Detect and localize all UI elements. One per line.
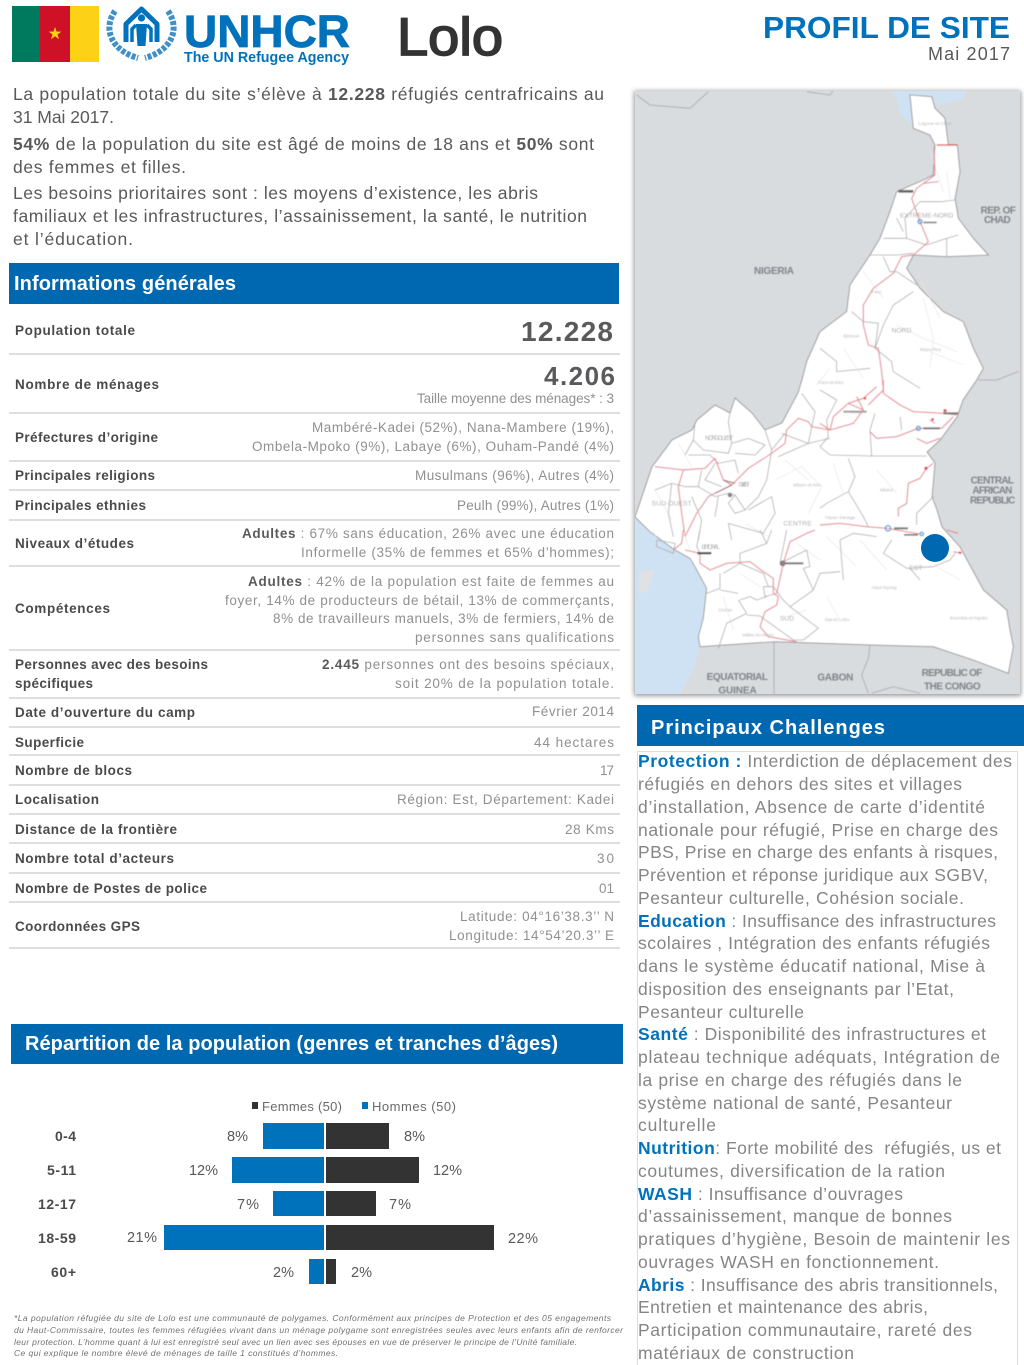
text: WASH: ouvrages WASH en fonctionnement. <box>638 1252 939 1272</box>
row: nombre de blocs <box>15 763 614 778</box>
bar chart: age pyramid: 12% <box>189 1163 218 1179</box>
row: distance de la frontière: 28 Kms <box>565 822 614 837</box>
panel: répartition de la population <box>11 1024 624 1358</box>
department labels <box>718 121 988 637</box>
text: abris <box>638 1275 998 1363</box>
row: compétences: foyer, 14% de producteurs de bétail, 13% de commerçants, <box>225 593 614 608</box>
department labels: Vina <box>850 409 860 414</box>
bar chart: age pyramid: 2% <box>273 1265 294 1281</box>
row: population totale <box>15 316 613 347</box>
text: education: dans le système éducatif national, Mise à <box>638 956 985 976</box>
row: préfectures d'origine <box>15 420 614 454</box>
UNHCR wordmark: UNHCR <box>184 6 350 57</box>
row: postes de police <box>15 881 614 896</box>
country labels: REP. OF <box>981 205 1016 216</box>
text: santé: Santé : Disponibilité des infrastructures et <box>638 1024 986 1044</box>
title: profil de site: Mai 2017 <box>928 44 1010 64</box>
row: principales religions <box>15 468 614 483</box>
row: préfectures d'origine: Préfectures d’origine <box>15 430 158 445</box>
text: education: disposition des enseignants par l’Etat, <box>638 979 954 999</box>
row: distance de la frontière: Distance de la frontière <box>15 822 177 837</box>
department labels: Vallée-du-Ntem <box>742 632 774 637</box>
intro text: et l’éducation. <box>13 229 133 249</box>
row: compétences: Compétences <box>15 601 110 616</box>
text: education <box>638 911 996 1022</box>
row: superficie <box>15 735 614 750</box>
bar chart: age pyramid: 5-11 <box>47 1162 76 1178</box>
row: personnes avec des besoins spécifiques: Personnes avec des besoins <box>15 657 208 672</box>
row: compétences: personnes sans qualifications <box>415 630 614 645</box>
text: protection: Prévention et réponse juridique aux SGBV, <box>638 865 988 885</box>
row: distance de la frontière <box>15 822 614 837</box>
row: préfectures d'origine: Ombela-Mpoko (9%), Labaye (6%), Ouham-Pandé (4%) <box>252 439 614 454</box>
Cameroon outline <box>635 95 1013 673</box>
icon: UNHCR emblem <box>109 9 174 58</box>
western sector lines <box>655 393 830 540</box>
row: population totale: 12.228 <box>521 316 613 347</box>
row: niveaux d'études <box>15 526 614 560</box>
bar chart: age pyramid: 2% <box>351 1265 372 1281</box>
text: santé: plateau technique adéquats, Intégration de <box>638 1047 1000 1067</box>
text: abris: matériaux de construction <box>638 1343 854 1363</box>
bar chart: age pyramid: 12-17 <box>38 1196 76 1212</box>
bar chart: age pyramid: 60+ <box>51 1264 76 1280</box>
Lake Chad and sea <box>891 91 966 124</box>
country labels: NIGERIA <box>754 266 794 277</box>
country labels <box>707 205 1016 696</box>
bar chart: age pyramid: 7% <box>237 1197 259 1213</box>
text: education: scolaires , Intégration des enfants réfugiés <box>638 933 990 953</box>
country labels: EQUATORIAL <box>707 672 768 683</box>
bar chart: age pyramid: 18-59 <box>38 1230 76 1246</box>
text: WASH: WASH : Insuffisance d’ouvrages <box>638 1184 903 1204</box>
row: principales religions: Musulmans (96%), Autres (4%) <box>415 468 614 483</box>
heading: informations générales: Informations générales <box>14 273 236 295</box>
text: abris: Entretien et maintenance des abris, <box>638 1297 928 1317</box>
heading: informations générales <box>9 263 619 304</box>
department labels: Bénoué <box>843 334 860 339</box>
row: niveaux d'études: Informelle (35% de femmes et 65% d’hommes); <box>301 545 614 560</box>
row: coordonnées GPS <box>15 909 614 943</box>
row: date d'ouverture: Février 2014 <box>532 704 614 719</box>
marker: Lolo site <box>921 534 949 562</box>
row: superficie: Superficie <box>15 735 84 750</box>
text: protection: d’installation, Absence de carte d’identité <box>638 797 985 817</box>
bar chart: age pyramid: 22% <box>508 1231 538 1247</box>
footnote <box>14 1313 624 1358</box>
row: postes de police: 01 <box>599 881 614 896</box>
country labels: AFRICAN <box>972 485 1012 496</box>
row: nombre de ménages: Taille moyenne des ménages* : 3 <box>417 391 614 406</box>
row: compétences: 8% de travailleurs manuels, 3% de fermiers, 14% de <box>273 611 614 626</box>
department labels: Faro-et-Déo <box>818 380 844 385</box>
department labels: Océan <box>718 608 732 613</box>
country labels: GABON <box>817 673 853 684</box>
department labels: Mbam-et-Kim <box>793 482 821 487</box>
region labels: EXTREME-NORD <box>900 213 954 220</box>
intro text: des femmes et filles. <box>13 157 186 177</box>
chart legend: Hommes (50) <box>372 1099 456 1114</box>
footnote: du Haut-Commissaire, toutes les femmes réfugiées vivant dans un ménage polygame sont enregistrées seules avec leurs enfants afin de renforcer <box>14 1325 624 1335</box>
southern sector lines <box>653 530 840 648</box>
row: localisation: Région: Est, Département: Kadei <box>397 792 614 807</box>
text: protection: nationale pour réfugié, Prise en charge des <box>638 820 998 840</box>
region labels: CENTRE <box>783 521 812 528</box>
text: santé: la prise en charge des réfugiés dans le <box>638 1070 962 1090</box>
text: WASH: d’assainissement, manque de bonnes <box>638 1206 952 1226</box>
department labels: Dja-et-Lobo <box>825 617 850 622</box>
region labels: OUEST <box>738 482 750 489</box>
row: localisation: Localisation <box>15 792 99 807</box>
UNHCR wordmark: The UN Refugee Agency <box>184 50 349 66</box>
neighbouring borders <box>637 90 1018 695</box>
text: abris: Participation communautaire, rareté des <box>638 1320 972 1340</box>
flag of Cameroon <box>12 6 99 62</box>
row: préfectures d'origine: Mambéré-Kadei (52%), Nana-Mambere (19%), <box>312 420 614 435</box>
panel: informations générales <box>9 263 620 948</box>
text: WASH <box>638 1184 1010 1272</box>
bar chart: age pyramid: 8% <box>227 1129 248 1145</box>
text: education: Education : Insuffisance des infrastructures <box>638 911 996 931</box>
row: personnes avec des besoins spécifiques: spécifiques <box>15 676 93 691</box>
heading: principaux challenges <box>637 705 1024 746</box>
title: profil de site: PROFIL DE SITE <box>763 10 1010 45</box>
region labels: NORD-OUEST <box>705 435 733 442</box>
row: niveaux d'études: Adultes : 67% sans éducation, 26% avec une éducation <box>242 526 614 541</box>
country labels: THE CONGO <box>924 682 981 693</box>
row: principales religions: Principales religions <box>15 468 155 483</box>
region labels: LITTORAL <box>702 544 720 551</box>
region labels <box>652 213 954 622</box>
eastern sector lines <box>820 380 962 580</box>
row: nombre de ménages <box>15 361 615 406</box>
department labels: Mbéré <box>880 488 894 493</box>
northern towns <box>918 220 922 224</box>
country labels: CENTRAL <box>971 475 1014 486</box>
row: compétences <box>15 574 614 645</box>
intro text: 54% de la population du site est âgé de moins de 18 ans et 50% sont <box>13 134 594 154</box>
row: nombre de ménages: 4.206 <box>544 361 615 391</box>
region labels: NORD <box>892 327 911 334</box>
department labels: Boumba-et-Ngoko <box>950 616 988 621</box>
country labels: GUINEA <box>718 685 757 696</box>
chart legend: Femmes (50) <box>262 1099 342 1114</box>
intro text: Les besoins prioritaires sont : les moyens d’existence, les abris <box>13 183 538 203</box>
intro text: 31 Mai 2017. <box>13 107 114 127</box>
department labels: Mayo-Rey <box>920 347 942 352</box>
footnote: leur protection. L’homme quant à lui est enregistré seul avec un lien avec ses épouses en vue de préserver le principe de l’Unité familiale. <box>14 1337 577 1347</box>
footnote: *La population réfugiée du site de Lolo est une communauté de polygames. Conformément aux principes de Protection et des 05 engagements <box>14 1313 612 1323</box>
panel: map of Cameroon <box>634 90 1021 696</box>
department labels: Logone-et-Chari <box>918 121 952 126</box>
row: principales ethnies <box>15 498 614 513</box>
region labels: SUD-OUEST <box>652 501 692 508</box>
panel: principaux challenges <box>637 705 1024 1365</box>
row: coordonnées GPS: Latitude: 04°16’38.3’’ N <box>460 909 614 924</box>
text: nutrition: coutumes, diversification de la ration <box>638 1161 945 1181</box>
row: nombre de blocs: Nombre de blocs <box>15 763 132 778</box>
bar chart: age pyramid: 0-4 <box>55 1128 76 1144</box>
title: profil de site <box>763 10 1010 64</box>
row: personnes avec des besoins spécifiques <box>15 657 614 691</box>
row: principales ethnies: Peulh (99%), Autres (1%) <box>457 498 614 513</box>
row: superficie: 44 hectares <box>534 735 614 750</box>
heading: répartition de la population <box>11 1024 623 1064</box>
text: WASH: pratiques d’hygiène, Besoin de maintenir les <box>638 1229 1010 1249</box>
text: education: Pesanteur culturelle <box>638 1002 804 1022</box>
department labels: Haute-Sanaga <box>825 515 855 520</box>
text: protection: Pesanteur culturelle, Cohésion sociale. <box>638 888 964 908</box>
row: nombre total d'acteurs <box>15 851 614 866</box>
text: protection: réfugiés en dehors des sites et villages <box>638 774 962 794</box>
row: nombre de blocs: 17 <box>600 763 614 778</box>
northern administrative borders <box>820 200 958 388</box>
intro text: familiaux et les infrastructures, l’assainissement, la santé, le nutrition <box>13 206 587 226</box>
department labels: Faro <box>872 289 882 294</box>
row: nombre total d'acteurs: 30 <box>597 851 614 866</box>
intro text <box>13 84 604 249</box>
text: protection: PBS, Prise en charge des enfants à risques, <box>638 842 998 862</box>
row: coordonnées GPS: Longitude: 14°54’20.3’’ E <box>449 928 614 943</box>
intro text: La population totale du site s’élève à 12.228 réfugiés centrafricains au <box>13 84 604 104</box>
northern road <box>863 147 935 405</box>
text: nutrition <box>638 1138 1001 1181</box>
row: nombre total d'acteurs: Nombre total d’acteurs <box>15 851 174 866</box>
country labels: CHAD <box>984 215 1011 226</box>
row: population totale: Population totale <box>15 323 135 338</box>
text: protection <box>638 751 1012 908</box>
department labels: Haut-Nyong <box>872 585 897 590</box>
row: date d'ouverture <box>15 704 614 720</box>
heading: répartition de la population: Répartition de la population (genres et tranches d’âges) <box>25 1033 558 1055</box>
text: protection: Protection : Interdiction de déplacement des <box>638 751 1012 771</box>
row: localisation <box>15 792 614 807</box>
site name: Lolo <box>397 8 503 67</box>
row: date d'ouverture: Date d’ouverture du camp <box>15 705 195 720</box>
country labels: REPUBLIC OF <box>922 668 982 679</box>
footnote: Ce qui explique le nombre élevé de ménages de taille 1 constitués d’hommes. <box>14 1348 338 1358</box>
bar chart: age pyramid <box>38 1123 538 1284</box>
bar chart: age pyramid: 21% <box>127 1230 157 1246</box>
text: nutrition: Nutrition: Forte mobilité des réfugiés, us et <box>638 1138 1001 1158</box>
row: nombre de ménages: Nombre de ménages <box>15 377 159 392</box>
heading: principaux challenges: Principaux Challenges <box>651 717 885 739</box>
row: postes de police: Nombre de Postes de police <box>15 881 207 896</box>
region labels: SUD <box>780 615 794 622</box>
bar chart: age pyramid: 8% <box>404 1129 425 1145</box>
text: santé <box>638 1024 1000 1135</box>
row: personnes avec des besoins spécifiques: soit 20% de la population totale. <box>395 676 614 691</box>
row: personnes avec des besoins spécifiques: 2.445 personnes ont des besoins spéciaux, <box>322 657 614 672</box>
chart legend <box>252 1099 456 1114</box>
row: niveaux d'études: Niveaux d’études <box>15 536 134 551</box>
bar chart: age pyramid: 7% <box>389 1197 411 1213</box>
region labels: EST <box>909 565 922 572</box>
country labels: REPUBLIC <box>970 495 1015 506</box>
text: santé: culturelle <box>638 1115 716 1135</box>
row: compétences: Adultes : 42% de la population est faite de femmes au <box>248 574 614 589</box>
row: principales ethnies: Principales ethnies <box>15 498 146 513</box>
text: abris: Abris : Insuffisance des abris transitionnels, <box>638 1275 998 1295</box>
bar chart: age pyramid: 12% <box>433 1163 462 1179</box>
text: santé: système national de santé, Pesanteur <box>638 1093 952 1113</box>
row: coordonnées GPS: Coordonnées GPS <box>15 919 140 934</box>
